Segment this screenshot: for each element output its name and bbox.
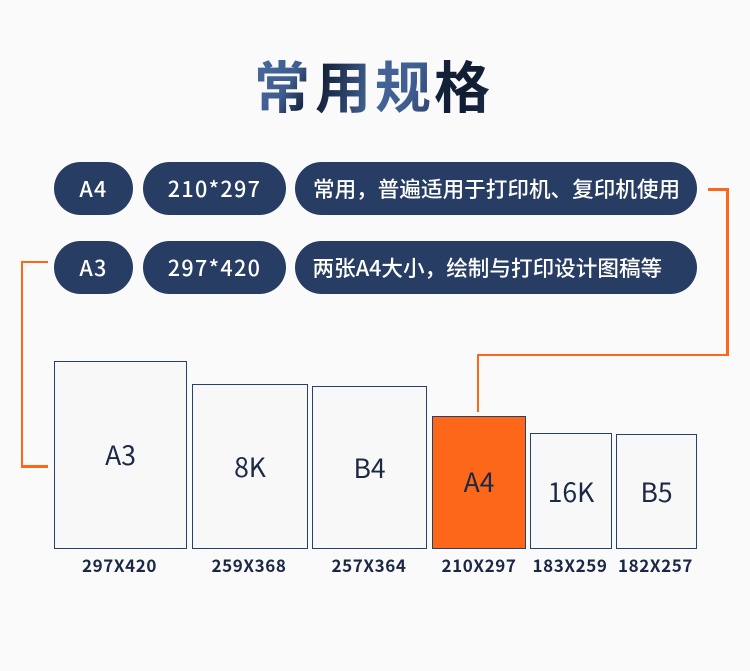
size box: 16K bbox=[530, 433, 612, 549]
size box: B5 bbox=[616, 434, 697, 549]
row 2 pill: A3 bbox=[54, 240, 133, 294]
row 2 pill: A3 usage bbox=[295, 240, 697, 294]
row 1 pill: A4 usage: 常用，普遍适用于打印机、复印机使用 bbox=[313, 173, 680, 204]
row 1 pill: A4: A4 bbox=[79, 173, 108, 204]
title bbox=[254, 44, 490, 125]
row 1 pill: A4 usage bbox=[295, 162, 697, 215]
title: 规 bbox=[375, 44, 431, 125]
row 2 pill: A3 usage: 两张A4大小，绘制与打印设计图稿等 bbox=[312, 252, 662, 282]
row 1 pill: A4 bbox=[54, 162, 133, 215]
size box: A3 bbox=[54, 361, 187, 549]
dimension label: A4: 210X297 bbox=[441, 552, 517, 577]
size box: A4 highlighted bbox=[432, 416, 526, 549]
size box: A4 highlighted: A4 bbox=[464, 461, 494, 500]
dimension label: 16K: 183X259 bbox=[532, 552, 608, 577]
row 2 pill: A3 dimensions bbox=[143, 240, 286, 294]
title: 常 bbox=[254, 44, 310, 125]
row 2 pill: A3 dimensions: 297*420 bbox=[168, 252, 261, 282]
size box: 8K: 8K bbox=[234, 446, 266, 485]
arrow: A3 connector bbox=[21, 261, 48, 468]
dimension label: B4: 257X364 bbox=[331, 552, 407, 577]
title: 格 bbox=[434, 44, 490, 125]
row 1 pill: A4 dimensions bbox=[143, 162, 286, 215]
arrow: A4 connector bbox=[477, 188, 729, 412]
size box: 8K bbox=[192, 384, 308, 549]
size box: B4 bbox=[312, 386, 427, 549]
row 1 pill: A4 dimensions: 210*297 bbox=[168, 173, 261, 204]
row 2 pill: A3: A3 bbox=[79, 252, 108, 282]
dimension label: A3: 297X420 bbox=[82, 552, 157, 577]
size box: 16K: 16K bbox=[548, 471, 594, 510]
size box: A3: A3 bbox=[105, 434, 136, 473]
dimension label: B5: 182X257 bbox=[618, 552, 693, 577]
size box: B5: B5 bbox=[640, 471, 673, 510]
title: 用 bbox=[315, 44, 371, 125]
dimension label: 8K: 259X368 bbox=[211, 552, 287, 577]
size box: B4: B4 bbox=[353, 447, 386, 486]
